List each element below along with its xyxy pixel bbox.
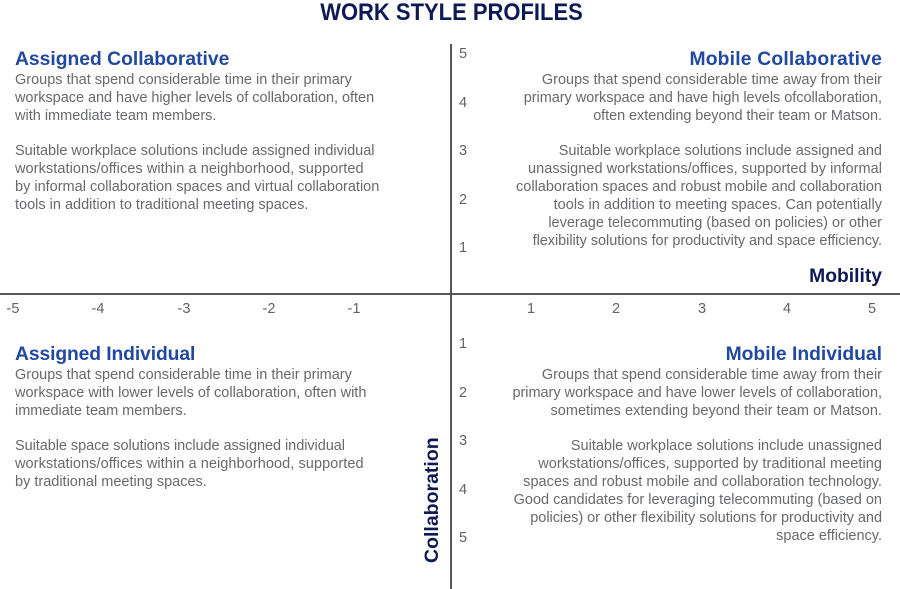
horizontal axis line bbox=[0, 293, 900, 295]
text: assigned individual solutions: by traditional meeting spaces. bbox=[15, 474, 207, 490]
panel: assigned collaborative bbox=[15, 49, 379, 213]
vertical axis numbers lower: 3 bbox=[459, 433, 467, 449]
horizontal axis numbers: 4 bbox=[783, 301, 791, 317]
text: mobile collaborative solutions: collaboration spaces and robust mobile and collaboration bbox=[516, 179, 882, 195]
vertical axis line bbox=[450, 44, 452, 589]
horizontal axis numbers: 3 bbox=[698, 301, 706, 317]
text: mobile individual description: primary workspace and have lower levels of collaboration, bbox=[512, 385, 882, 401]
heading: assigned individual: Assigned Individual bbox=[15, 344, 195, 365]
text: mobile collaborative description: primary workspace and have high levels ofcollaboration, bbox=[524, 90, 882, 106]
text: assigned individual description bbox=[15, 367, 366, 419]
vertical axis numbers upper: 2 bbox=[459, 192, 467, 208]
text: mobile individual solutions: policies) or other flexibility solutions for productivity and bbox=[530, 510, 882, 526]
text: mobile collaborative solutions: flexibility solutions for productivity and space efficiency. bbox=[533, 233, 882, 249]
text: assigned individual description: workspace with lower levels of collaboration, often with bbox=[15, 385, 366, 401]
horizontal axis numbers: -5 bbox=[7, 301, 19, 317]
panel: mobile collaborative bbox=[516, 49, 882, 249]
horizontal axis numbers bbox=[7, 301, 876, 317]
heading: assigned collaborative: Assigned Collaborative bbox=[15, 49, 229, 70]
text: mobile collaborative description: often extending beyond their team or Matson. bbox=[593, 108, 882, 124]
text: assigned collaborative solutions: by informal collaboration spaces and virtual collaboration bbox=[15, 179, 379, 195]
vertical axis numbers upper: 4 bbox=[459, 95, 467, 111]
text: assigned collaborative description: workspace and have higher levels of collaboration, often bbox=[15, 90, 374, 106]
horizontal axis numbers: 5 bbox=[868, 301, 876, 317]
text: mobile collaborative solutions bbox=[516, 143, 882, 249]
horizontal axis numbers: 2 bbox=[612, 301, 620, 317]
vertical axis numbers lower: 4 bbox=[459, 482, 467, 498]
panel: mobile individual bbox=[512, 344, 882, 544]
vertical axis numbers lower: 2 bbox=[459, 385, 467, 401]
text: mobile individual description: sometimes extending beyond their team or Matson. bbox=[550, 403, 882, 419]
text: mobile individual solutions: workstations/offices, supported by traditional meeting bbox=[538, 456, 882, 472]
text: assigned collaborative solutions: Suitable workplace solutions include assigned individual bbox=[15, 143, 374, 159]
text: assigned collaborative solutions: workstations/offices within a neighborhood, supported bbox=[15, 161, 364, 177]
horizontal axis numbers: 1 bbox=[527, 301, 535, 317]
text: mobile individual description: Groups that spend considerable time away from their bbox=[542, 367, 882, 383]
vertical axis numbers upper: 5 bbox=[459, 46, 467, 62]
text: assigned collaborative solutions: tools in addition to traditional meeting spaces. bbox=[15, 197, 308, 213]
vertical axis numbers upper bbox=[459, 46, 467, 256]
text: assigned collaborative description bbox=[15, 72, 374, 124]
text: assigned collaborative description: Groups that spend considerable time in their primary bbox=[15, 72, 352, 88]
text: mobile individual solutions bbox=[514, 438, 882, 544]
horizontal axis numbers: -3 bbox=[178, 301, 190, 317]
text: mobile individual description bbox=[512, 367, 882, 419]
horizontal axis numbers: -4 bbox=[92, 301, 104, 317]
text: assigned individual solutions: workstations/offices within a neighborhood, supported bbox=[15, 456, 364, 472]
text: mobile individual solutions: space efficiency. bbox=[776, 528, 882, 544]
text: mobile individual solutions: spaces and robust mobile and collaboration technology. bbox=[523, 474, 882, 490]
axis label: mobility: Mobility bbox=[809, 266, 882, 287]
text: assigned collaborative solutions bbox=[15, 143, 379, 213]
text: mobile collaborative solutions: tools in addition to meeting spaces. Can potentially bbox=[554, 197, 882, 213]
text: mobile collaborative description: Groups that spend considerable time away from their bbox=[542, 72, 882, 88]
horizontal axis numbers: -2 bbox=[263, 301, 275, 317]
text: assigned individual description: Groups that spend considerable time in their primary bbox=[15, 367, 352, 383]
text: mobile collaborative solutions: leverage telecommuting (based on policies) or other bbox=[548, 215, 882, 231]
text: assigned collaborative description: with immediate team members. bbox=[15, 108, 216, 124]
vertical axis numbers upper: 1 bbox=[459, 240, 467, 256]
text: mobile collaborative solutions: Suitable workplace solutions include assigned and bbox=[559, 143, 882, 159]
vertical axis numbers upper: 3 bbox=[459, 143, 467, 159]
vertical axis numbers lower: 5 bbox=[459, 530, 467, 546]
text: mobile collaborative solutions: unassigned workstations/offices, supported by informal bbox=[528, 161, 882, 177]
vertical axis numbers lower bbox=[459, 336, 467, 546]
heading: mobile individual: Mobile Individual bbox=[726, 344, 882, 365]
heading: mobile collaborative: Mobile Collaborative bbox=[689, 49, 882, 70]
text: assigned individual solutions bbox=[15, 438, 364, 490]
text: assigned individual solutions: Suitable space solutions include assigned individual bbox=[15, 438, 345, 454]
axis label: collaboration: Collaboration bbox=[421, 437, 443, 563]
text: mobile collaborative description bbox=[524, 72, 882, 124]
vertical axis numbers lower: 1 bbox=[459, 336, 467, 352]
text: mobile individual solutions: Suitable workplace solutions include unassigned bbox=[571, 438, 882, 454]
text: mobile individual solutions: Good candidates for leveraging telecommuting (based on bbox=[514, 492, 882, 508]
horizontal axis numbers: -1 bbox=[348, 301, 360, 317]
panel: assigned individual bbox=[15, 344, 366, 490]
text: assigned individual description: immediate team members. bbox=[15, 403, 187, 419]
